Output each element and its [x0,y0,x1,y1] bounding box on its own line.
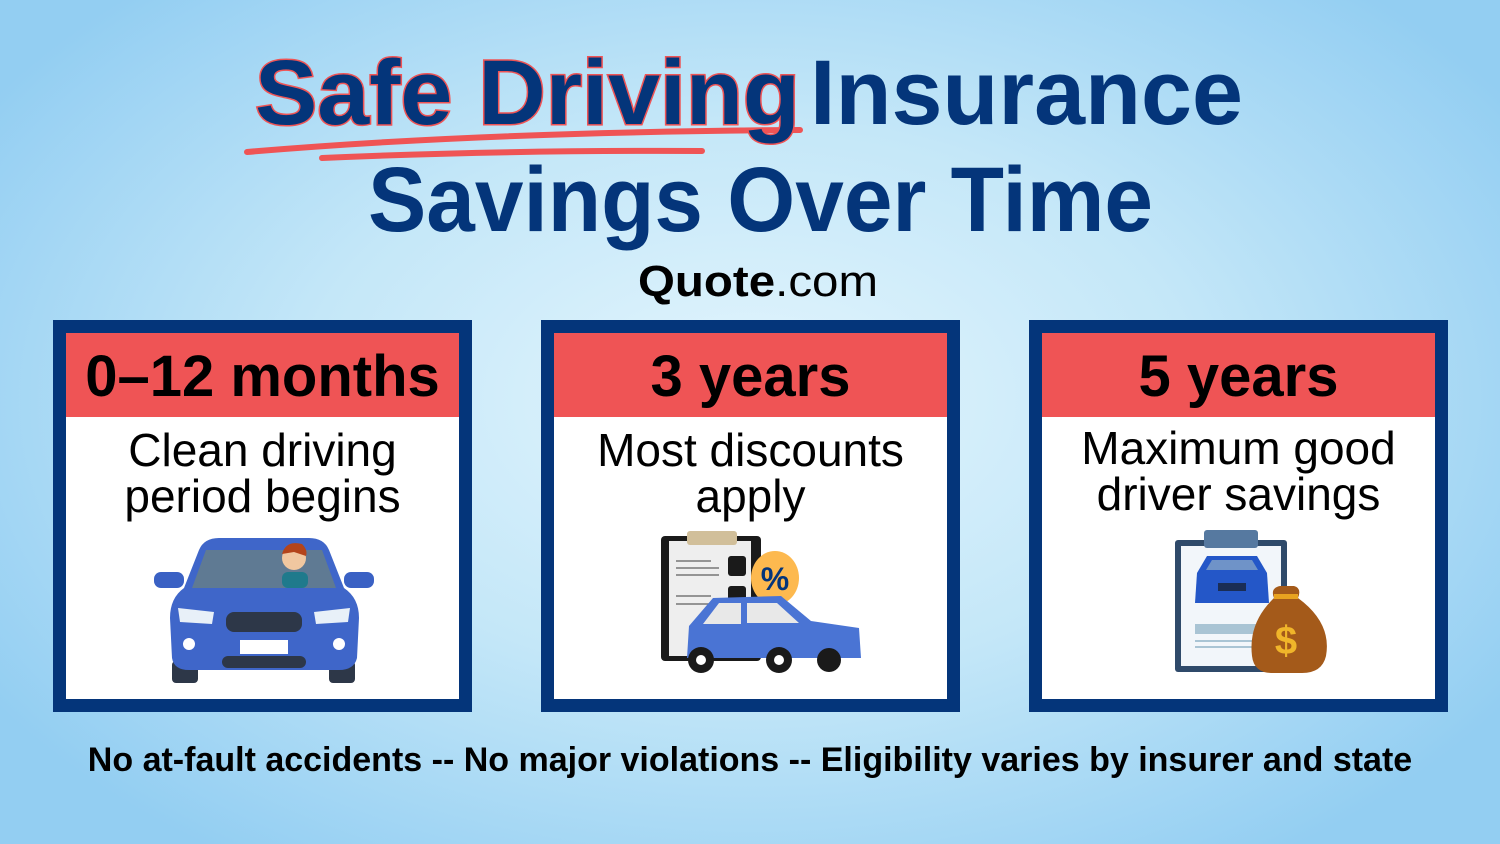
title [244,42,1243,306]
icon: clipboard with car and money bag: $ [1275,619,1297,663]
title line 2: Savings Over Time [368,149,1153,251]
icon: clipboard with car and percent [661,531,861,673]
title line 1: Insurance [810,42,1243,144]
panel: 3 years: Most discounts [597,424,904,476]
panel: 0-12 months [53,320,472,712]
panel: 5 years [1029,320,1448,712]
title line 1 [255,42,1243,144]
panel: 0-12 months: Clean driving [128,424,397,476]
icon: car with driver [154,538,374,683]
title line 1: Safe Driving [255,42,800,144]
brand: Quote.com [638,257,878,306]
icon: clipboard with car and percent: % [761,561,789,597]
footer note: No at-fault accidents -- No major violations -- Eligibility varies by insurer and state [88,741,1412,779]
panel: 3 years: 3 years [650,344,850,409]
icon: clipboard with car and money bag [1175,530,1327,673]
panel: 3 years: apply [696,470,805,522]
panel: 0-12 months: period begins [124,470,401,522]
panel: 0-12 months: 0–12 months [85,344,440,409]
panel: 3 years [541,320,960,712]
panel: 5 years: 5 years [1138,344,1338,409]
panel: 5 years: driver savings [1097,468,1380,520]
underline squiggle [247,130,800,158]
panel: 5 years: Maximum good [1081,422,1396,474]
